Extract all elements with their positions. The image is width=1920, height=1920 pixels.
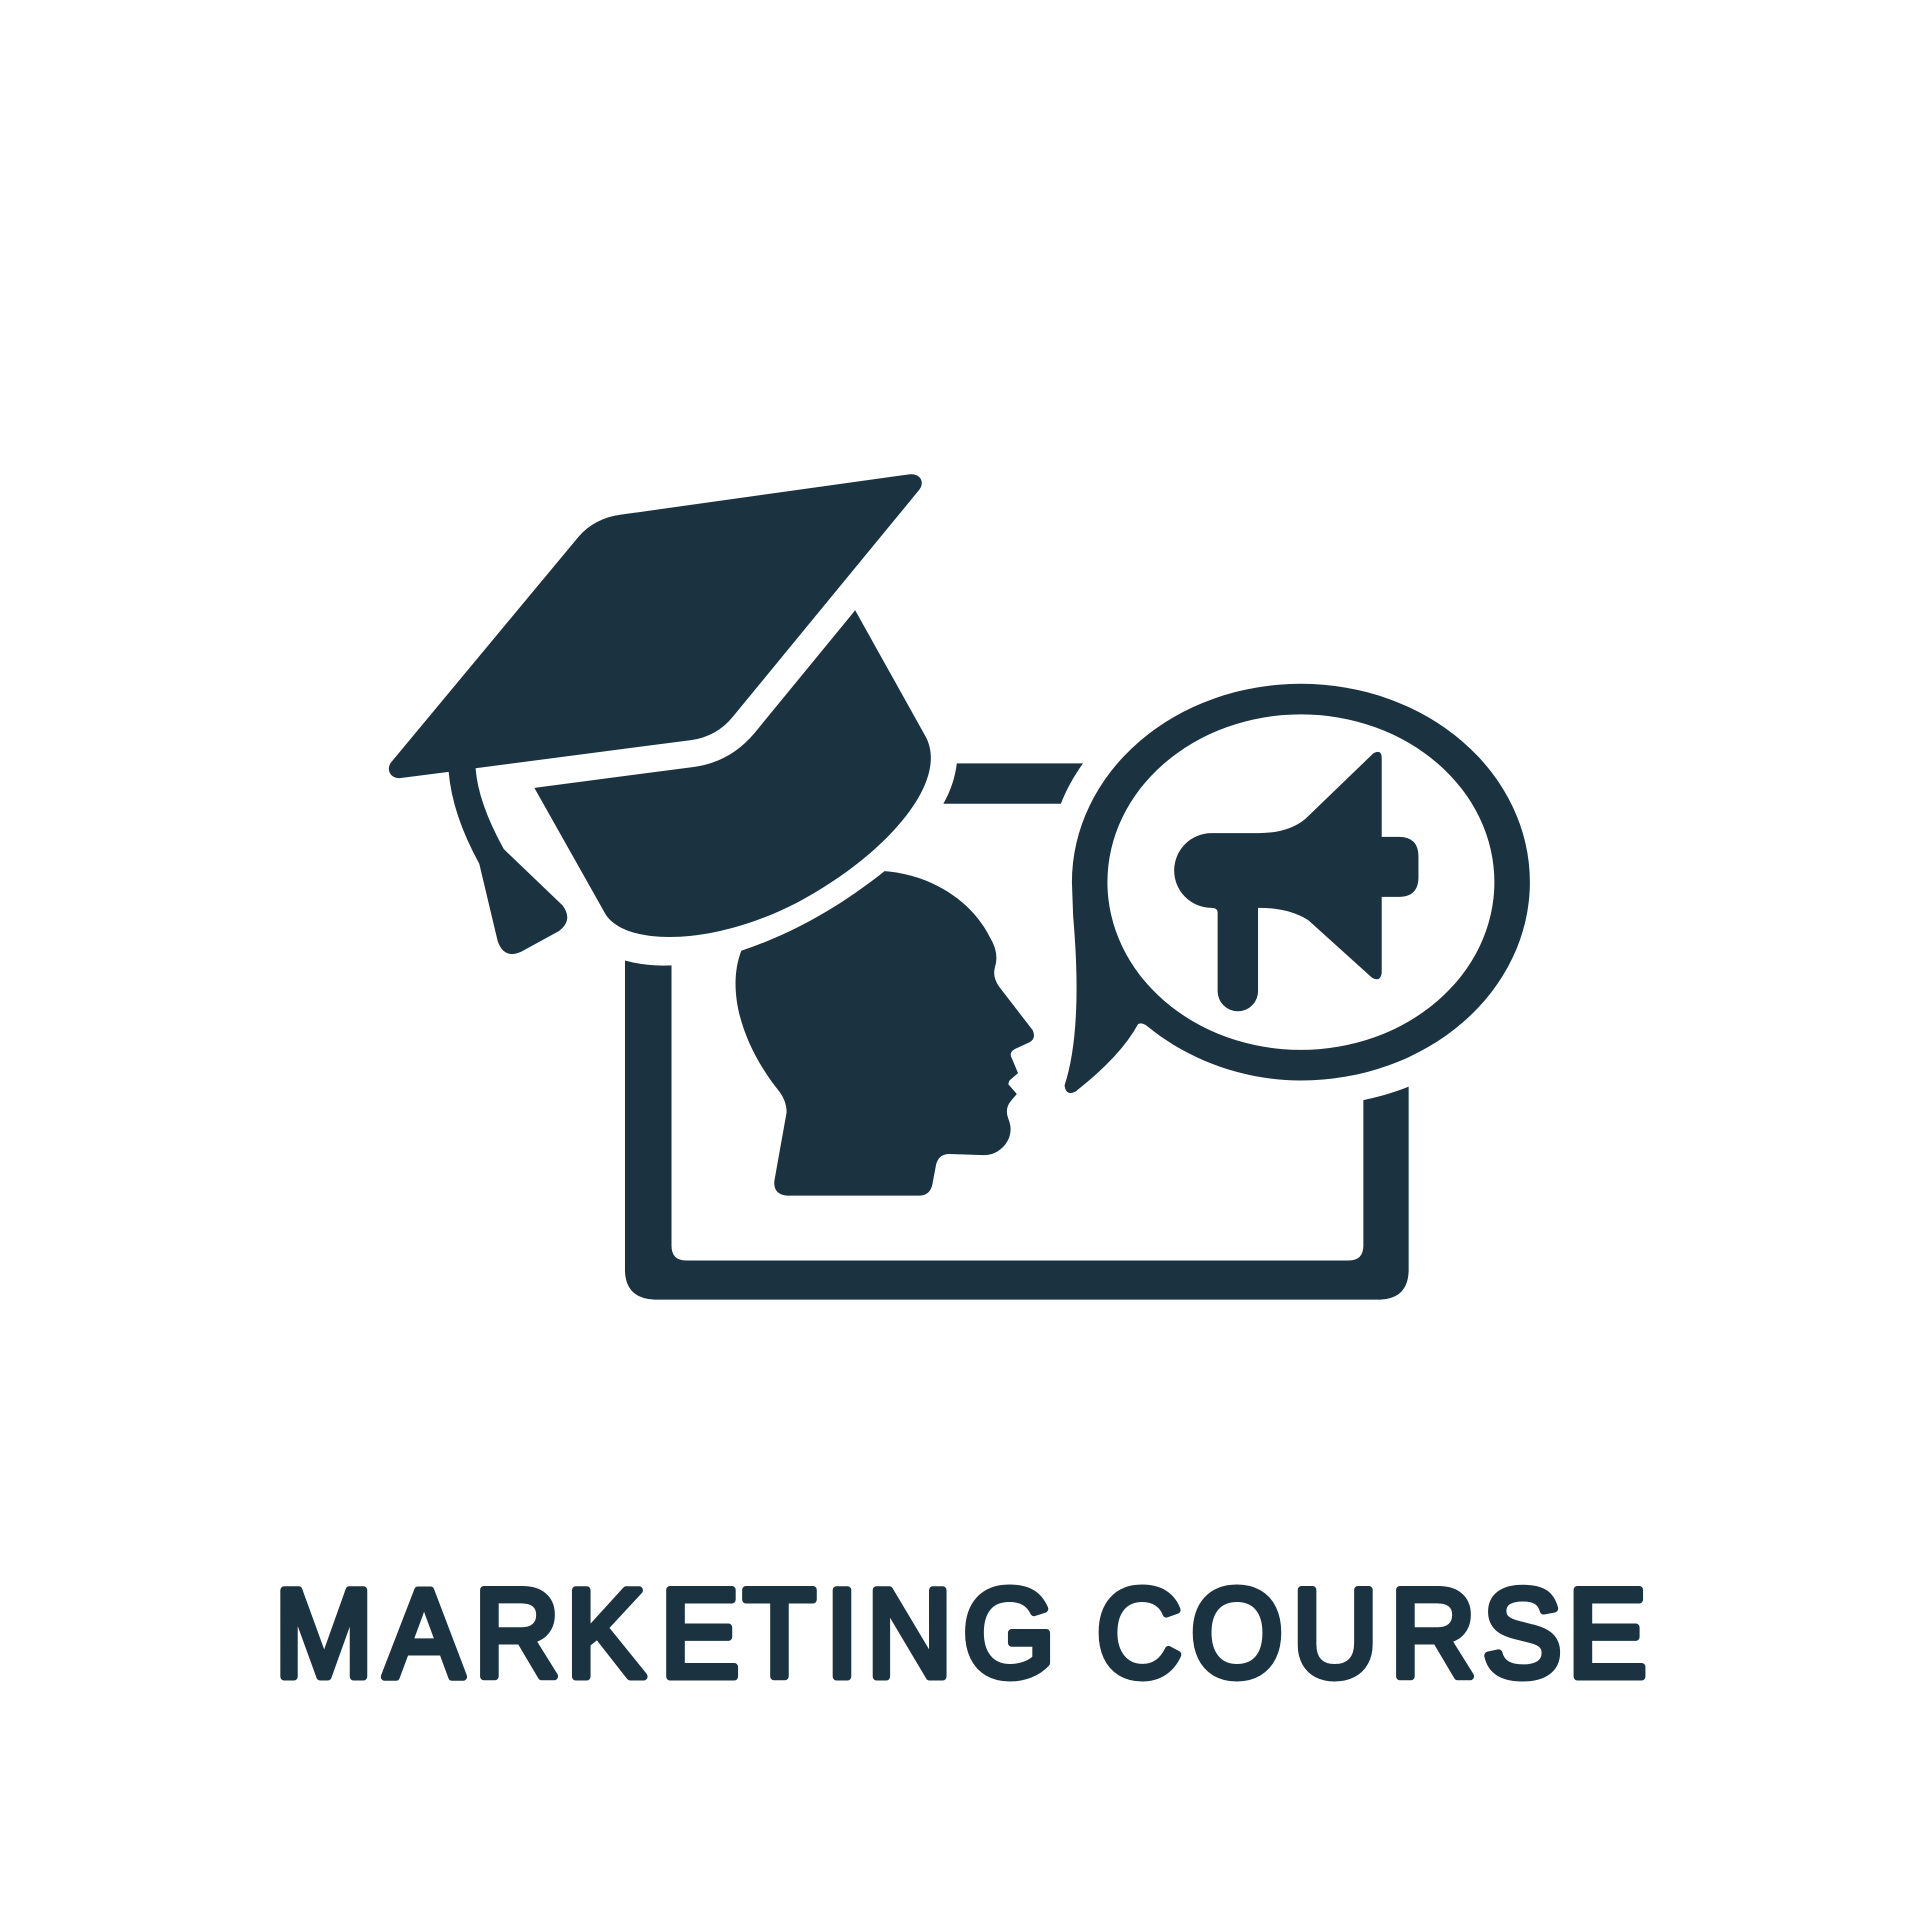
title: MARKETING COURSE [274,1564,1647,1703]
icon: speech bubble [1065,684,1530,1093]
icon: connector bar [943,763,1083,804]
icon: human head profile [736,871,1034,1196]
icon: graduation cap base [534,610,931,937]
icon: marketing course emblem [389,474,1530,1300]
icon: megaphone [1174,752,1418,1011]
icon: graduation cap board with tassel [389,474,922,954]
icon: screen frame [625,960,1409,1300]
